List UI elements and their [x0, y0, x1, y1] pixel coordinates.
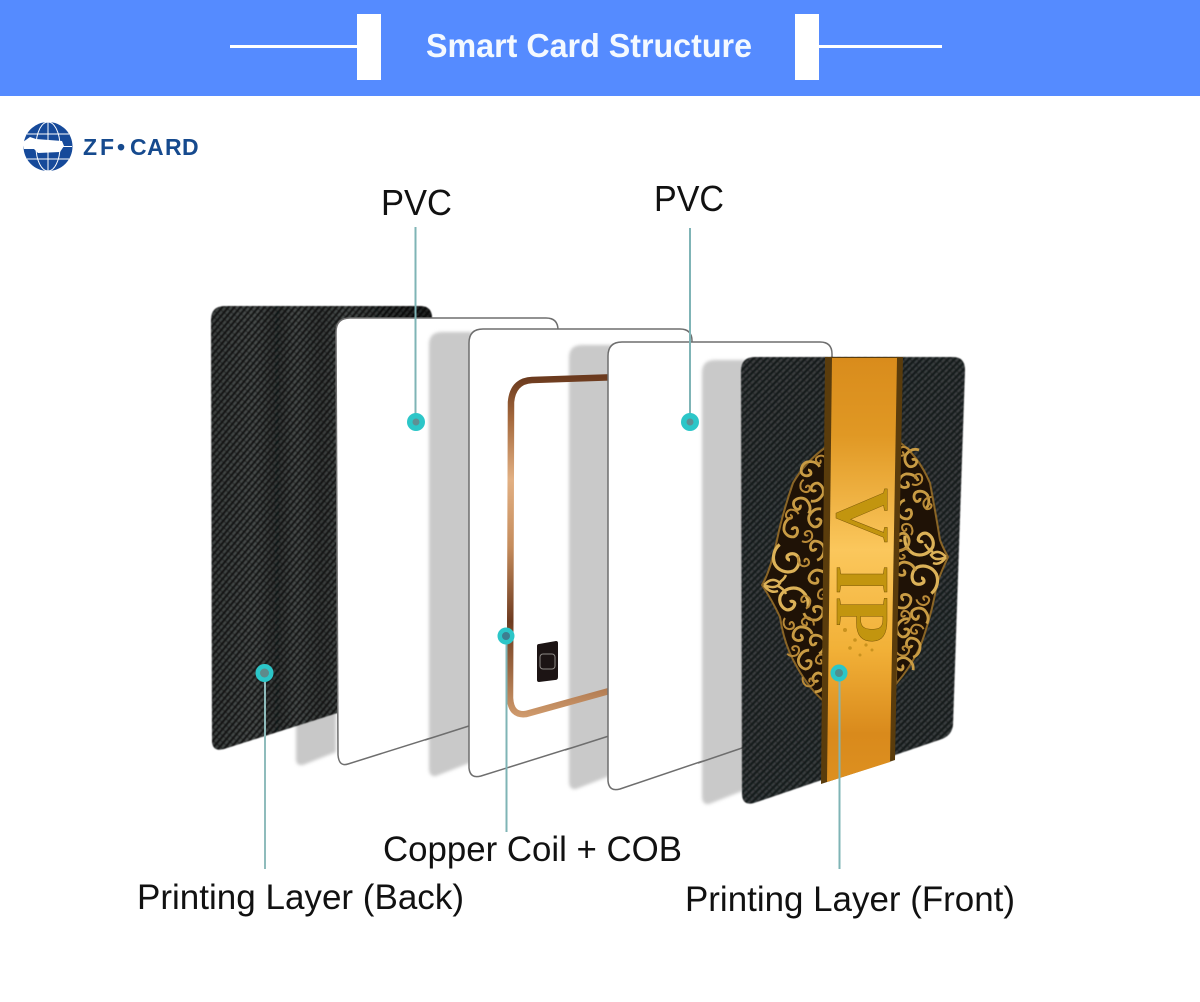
- gold band: [820, 357, 904, 784]
- card shadow 1: [429, 332, 472, 776]
- label: PVC right: PVC: [654, 178, 724, 219]
- header right bracket: [795, 14, 942, 80]
- leader line: [414, 227, 416, 422]
- header banner: [0, 0, 1200, 96]
- header left bracket: [230, 14, 381, 80]
- marker dot: [256, 664, 274, 682]
- leader line: [689, 228, 691, 422]
- leader line: [838, 673, 840, 869]
- card: back printing layer: [211, 306, 432, 750]
- label: Copper Coil + COB: [383, 628, 682, 869]
- logo wordmark: ZF•CARD: [83, 134, 199, 160]
- label: PVC left: [381, 182, 452, 431]
- copper coil: [510, 377, 620, 714]
- label: Printing Layer (Back): [137, 664, 464, 917]
- marker dot: [407, 413, 425, 431]
- leader line: [264, 673, 266, 869]
- card: copper coil layer: [469, 329, 692, 789]
- logo: ZF-CARD: [23, 122, 199, 171]
- card shadow 2: [569, 345, 612, 789]
- VIP lettering: VIP: [820, 488, 904, 643]
- label: Printing Layer (Front): [685, 664, 1015, 919]
- marker dot: [830, 664, 848, 682]
- icon: globe: [23, 122, 72, 171]
- label: PVC right: [654, 178, 724, 431]
- label: Printing Layer (Back): Printing Layer (Back): [137, 878, 464, 917]
- card: PVC layer 2: [608, 342, 832, 804]
- title: Smart Card Structure: [426, 27, 752, 64]
- marker dot: [681, 413, 699, 431]
- card: front printing layer: [741, 357, 965, 804]
- leader line: [506, 636, 508, 832]
- COB chip: [537, 641, 558, 682]
- label: Copper Coil + COB: Copper Coil + COB: [383, 830, 682, 869]
- card 2 bottom edge over shadow: [565, 735, 612, 750]
- card shadow 3: [702, 360, 745, 804]
- VIP sparkle detail: [843, 628, 874, 656]
- card 1 bottom edge over shadow: [425, 725, 472, 740]
- marker dot: [498, 628, 514, 644]
- label: Printing Layer (Front): Printing Layer (Front): [685, 880, 1015, 919]
- shadow behind second layer: [296, 700, 336, 765]
- ornament left: [762, 447, 830, 703]
- label: PVC left: PVC: [381, 182, 452, 223]
- card: PVC layer 1: [336, 318, 558, 776]
- ornament right: [890, 441, 948, 684]
- card 3 bottom edge over shadow: [698, 747, 745, 763]
